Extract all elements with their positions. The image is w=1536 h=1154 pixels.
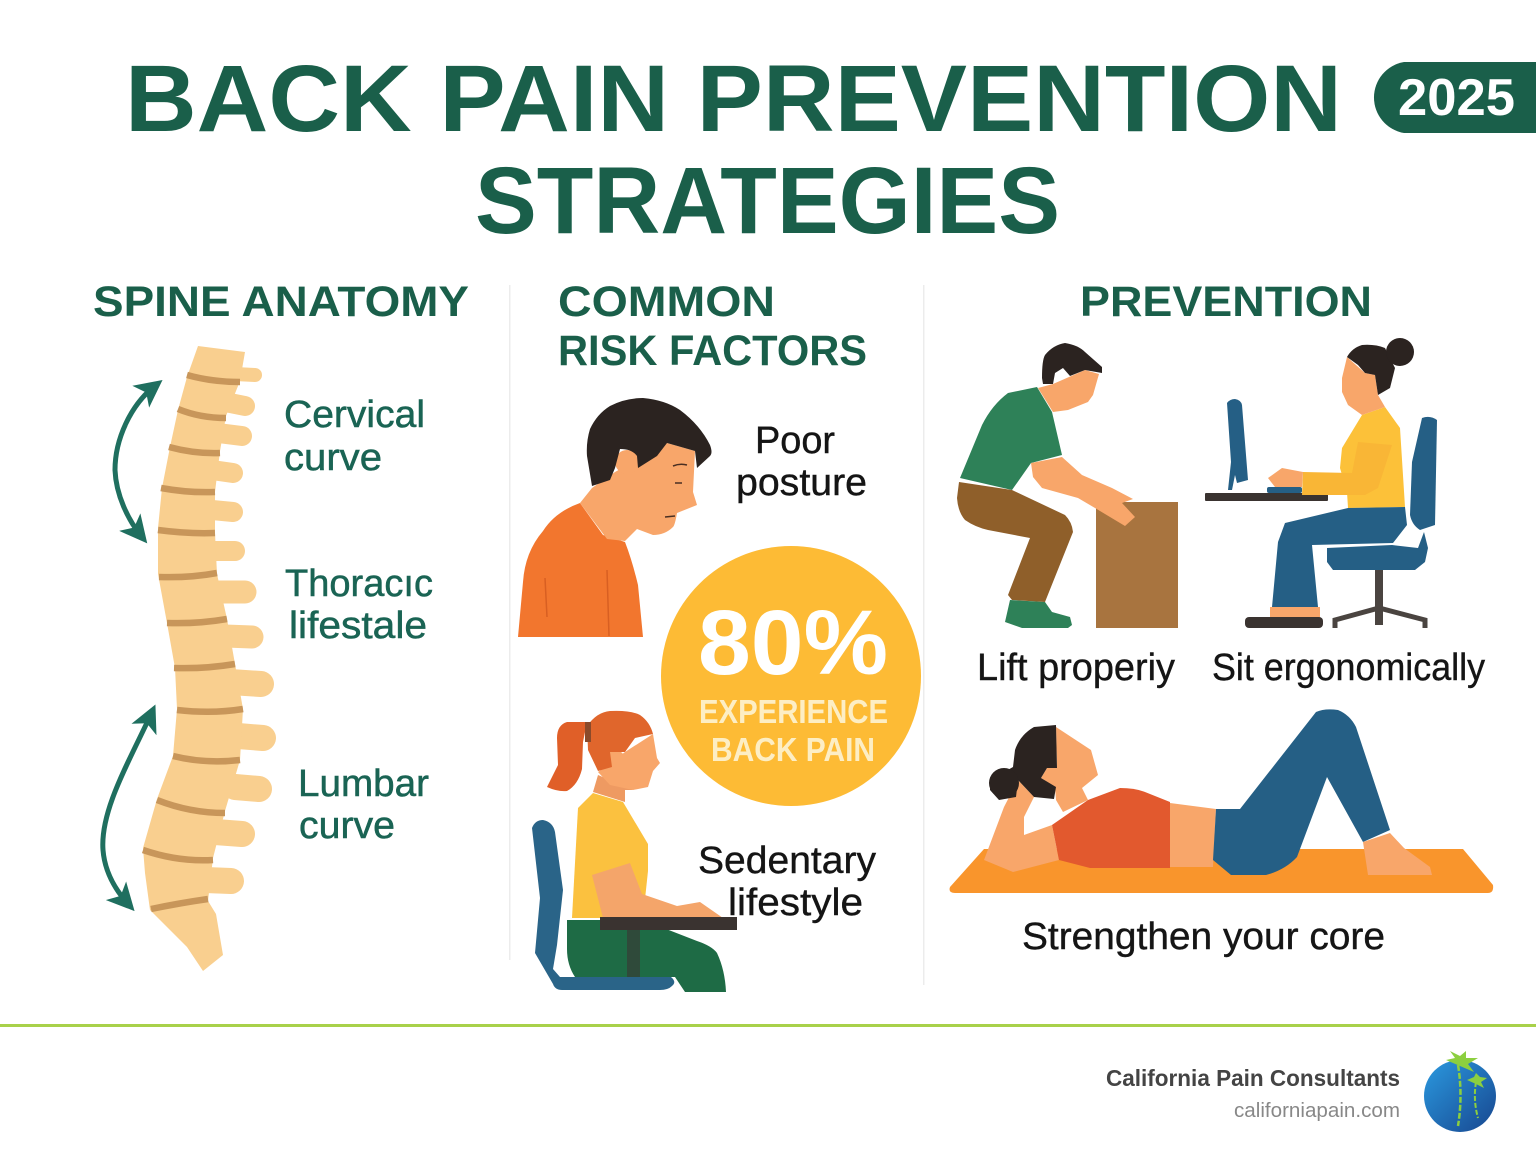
year badge: 2025 — [1398, 69, 1515, 127]
arrow: cervical curve — [115, 385, 156, 537]
label: sit ergonomically: Sit ergonomically — [1212, 647, 1485, 689]
heading: common risk factors: COMMON — [558, 278, 775, 326]
label: strengthen your core: Strengthen your core — [1022, 916, 1385, 958]
icon: logo globe with palm — [1424, 1051, 1496, 1132]
icon: core exercise — [950, 709, 1493, 893]
label: poor posture: Poor — [755, 420, 835, 462]
heading: spine anatomy: SPINE ANATOMY — [93, 278, 469, 326]
title — [125, 46, 1342, 254]
callout: 80 percent — [661, 546, 921, 806]
label: lumbar curve: Lumbar — [298, 763, 429, 805]
spine illustration — [143, 346, 263, 971]
panel: spine anatomy — [93, 278, 469, 971]
label: lumbar curve: curve — [299, 805, 395, 847]
label: thoracic: lifestale — [289, 605, 427, 647]
arrow: lumbar curve — [103, 712, 152, 905]
footer: brand text: California Pain Consultants — [1106, 1065, 1400, 1091]
callout: 80 percent: 80% — [698, 592, 888, 694]
icon: sitting at desk — [1205, 338, 1437, 628]
label: lift properly: Lift properiy — [977, 647, 1175, 689]
label: sedentary lifestyle: lifestyle — [728, 882, 863, 924]
callout: 80 percent: EXPERIENCE — [699, 693, 888, 730]
icon: sedentary person — [532, 711, 737, 992]
heading: common risk factors: RISK FACTORS — [558, 327, 867, 375]
icon: poor posture person — [518, 398, 712, 637]
footer: brand text — [1106, 1065, 1400, 1122]
footer: brand text: californiapain.com — [1234, 1100, 1400, 1122]
label: thoracic: Thoracıc — [285, 563, 433, 605]
label: cervical curve: curve — [284, 437, 382, 479]
label: cervical curve: Cervical — [284, 394, 425, 436]
title: BACK PAIN PREVENTION — [125, 46, 1342, 152]
year badge — [1374, 62, 1536, 133]
panel: risk factors — [518, 278, 921, 992]
callout: 80 percent: BACK PAIN — [711, 731, 875, 768]
heading: prevention: PREVENTION — [1080, 278, 1372, 326]
label: poor posture: posture — [736, 462, 867, 504]
title: STRATEGIES — [475, 148, 1060, 254]
icon: lifting person — [957, 343, 1178, 628]
label: sedentary lifestyle: Sedentary — [698, 840, 876, 882]
panel: prevention — [950, 278, 1493, 958]
